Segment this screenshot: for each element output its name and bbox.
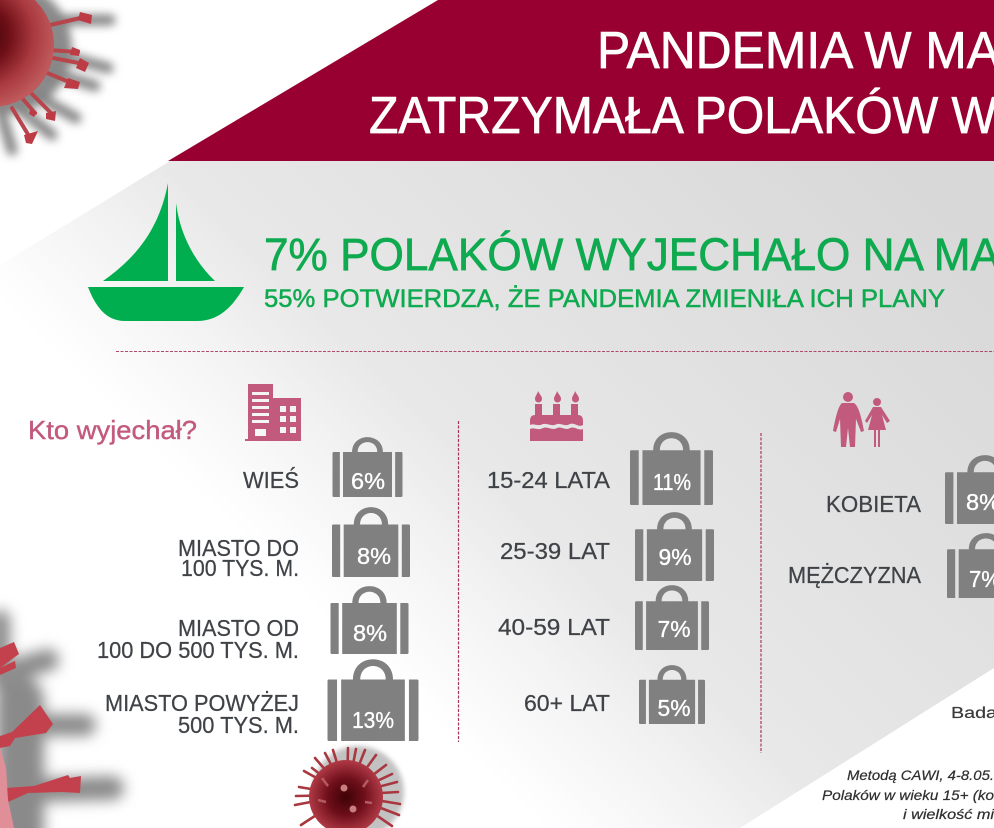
- row: 25-39: 25-39 LAT: [500, 538, 610, 564]
- icon: sailing boat: [88, 183, 244, 321]
- methodology note: i wielkość mi: [903, 807, 994, 822]
- row: mężczyzna: [788, 533, 994, 598]
- row: 60+: 5%: [658, 695, 690, 721]
- subheadline: 55%: 55% POTWIERDZA, ŻE PANDEMIA ZMIENIŁA ICH PLANY: [264, 284, 945, 313]
- row: 15-24: 11%: [653, 469, 691, 495]
- row: miasto 100-500: [97, 586, 408, 663]
- headline: 7%: 7% POLAKÓW WYJECHAŁO NA MA: [264, 229, 994, 280]
- column 3: gender: [788, 455, 994, 598]
- row: 15-24: 15-24 LATA: [487, 467, 611, 493]
- row: 60+: 60+ LAT: [524, 690, 610, 716]
- row: 25-39: [500, 512, 714, 581]
- title banner: [168, 0, 994, 161]
- source note: Bada: [951, 705, 994, 722]
- row: 40-59: 7%: [658, 616, 690, 642]
- row: 40-59: 40-59 LAT: [498, 614, 610, 640]
- row: miasto 100-500: MIASTO OD: [178, 615, 299, 641]
- icon: man and woman: [833, 392, 890, 447]
- methodology note: Metodą CAWI, 4-8.05.: [847, 768, 994, 783]
- row: wieś: [243, 437, 402, 497]
- row: miasto do 100: MIASTO DO: [178, 535, 299, 561]
- row: kobieta: KOBIETA: [826, 491, 922, 517]
- methodology note: [822, 768, 994, 822]
- row: miasto 100-500: 8%: [353, 620, 387, 646]
- methodology note: Polaków w wieku 15+ (ko: [822, 788, 994, 803]
- icon: building: [245, 384, 301, 441]
- virus: lower left: [0, 620, 112, 828]
- row: kobieta: [826, 455, 994, 524]
- row: miasto 100-500: 100 DO 500 TYS. M.: [97, 637, 299, 663]
- row: miasto powyżej 500: 13%: [352, 707, 394, 733]
- row: 60+: [524, 665, 705, 724]
- row: 15-24: [487, 432, 713, 505]
- row: miasto do 100: [178, 507, 410, 581]
- column 2: age: [487, 432, 714, 724]
- row: miasto powyżej 500: [105, 659, 418, 741]
- row: miasto do 100: 100 TYS. M.: [181, 555, 299, 581]
- row: miasto powyżej 500: MIASTO POWYŻEJ: [105, 690, 299, 716]
- title text: [369, 22, 994, 145]
- row: miasto do 100: 8%: [357, 543, 391, 569]
- virus: small bottom: [295, 746, 404, 828]
- row: wieś: 6%: [351, 468, 385, 494]
- row: 40-59: [498, 585, 709, 650]
- virus: top left: [0, 0, 110, 150]
- row: miasto powyżej 500: 500 TYS. M.: [178, 712, 299, 738]
- column 1: place of residence: [97, 437, 418, 741]
- label: Kto wyjechał: Kto wyjechał?: [28, 415, 197, 445]
- row: wieś: WIEŚ: [243, 466, 299, 493]
- icon: birthday cake: [530, 391, 583, 441]
- row: mężczyzna: MĘŻCZYZNA: [788, 562, 922, 588]
- row: 25-39: 9%: [658, 544, 692, 570]
